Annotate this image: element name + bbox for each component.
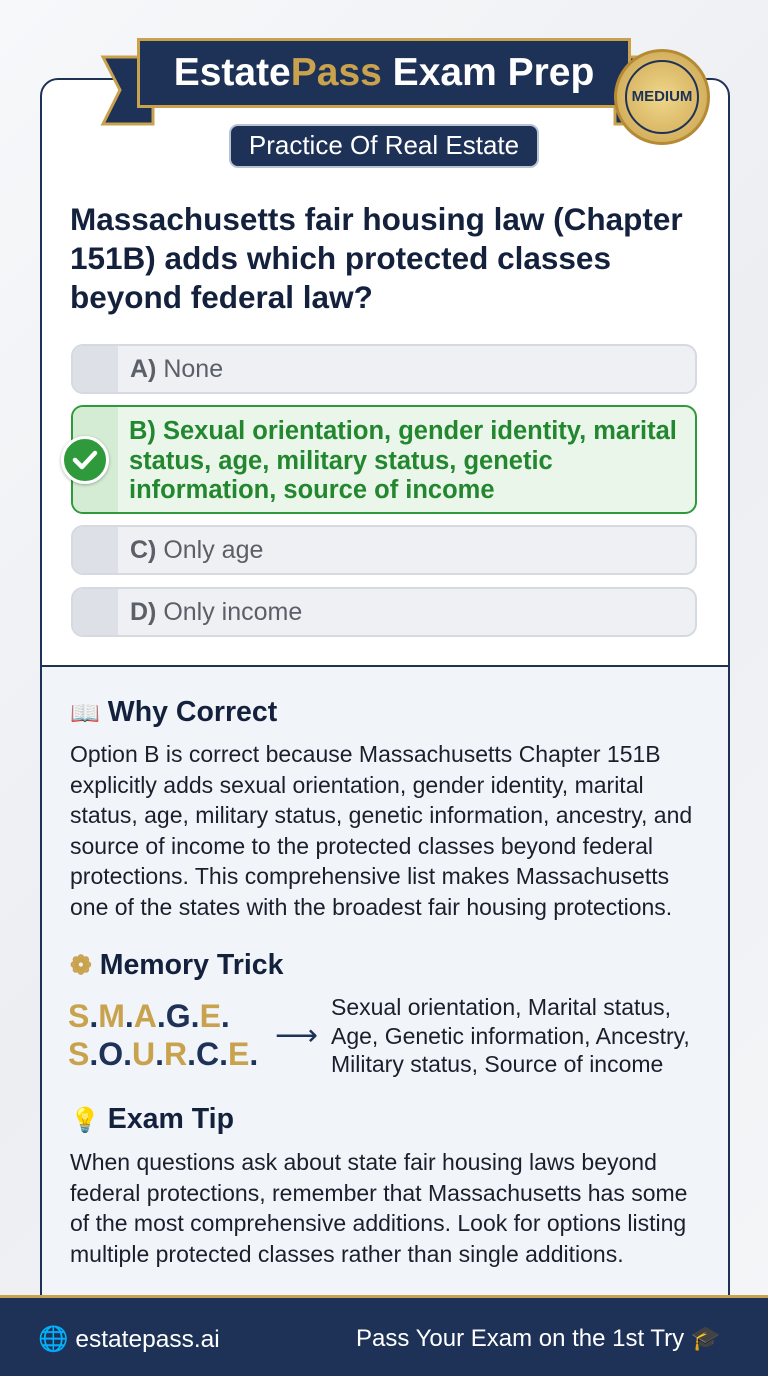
option A	[71, 344, 697, 394]
medal badge	[614, 49, 710, 145]
subtitle pill	[229, 124, 539, 168]
subtitle pill: Practice Of Real Estate	[249, 130, 519, 160]
arrow: ⟶	[275, 1019, 318, 1052]
memory trick heading: ❁ Memory Trick	[70, 949, 283, 981]
mnemonic meaning	[331, 994, 690, 1077]
option B correct	[71, 405, 697, 514]
footer tagline: Pass Your Exam on the 1st Try 🎓	[356, 1325, 721, 1352]
option C	[71, 525, 697, 575]
ribbon tail right	[614, 56, 638, 126]
lower explanation panel	[42, 665, 728, 1365]
mnemonic meaning: Military status, Source of income	[331, 1051, 663, 1077]
option A: A) None	[130, 355, 223, 383]
title banner: EstatePass Exam Prep	[174, 51, 594, 94]
exam tip body: When questions ask about state fair housing laws beyond federal protections, remember that Massachusetts has some of the most comprehensive additions. Look for options listing multiple protected classes rather than single additions.	[70, 1149, 687, 1266]
footer website: 🌐 estatepass.ai	[38, 1326, 220, 1353]
option C: C) Only age	[130, 536, 263, 564]
mnemonic meaning: Sexual orientation, Marital status,	[331, 994, 671, 1020]
mnemonic: S.M.A.G.E.	[68, 998, 230, 1034]
mnemonic: S.O.U.R.C.E.	[68, 1036, 258, 1072]
mnemonic	[68, 998, 258, 1072]
mnemonic meaning: Age, Genetic information, Ancestry,	[331, 1022, 690, 1048]
icon: check	[61, 436, 109, 484]
ribbon tail left	[100, 56, 154, 126]
option D	[71, 587, 697, 637]
medal badge: MEDIUM	[632, 88, 692, 105]
title banner	[137, 38, 631, 108]
why correct heading: 📖 Why Correct	[70, 696, 277, 728]
footer	[0, 1295, 768, 1376]
option D: D) Only income	[130, 598, 302, 626]
why correct body: Option B is correct because Massachusetts Chapter 151B explicitly adds sexual orientation, gender identity, marital status, age, military status, genetic information, ancestry, and source of income to the protected classes beyond federal protections. This comprehensive list makes Massachusetts one of the states with the broadest fair housing protections.	[70, 741, 692, 920]
exam tip heading: 💡 Exam Tip	[70, 1103, 234, 1135]
option B correct: B) Sexual orientation, gender identity, marital status, age, military status, genetic information, source of income	[129, 417, 677, 504]
question: Massachusetts fair housing law (Chapter 151B) adds which protected classes beyond federal law?	[70, 201, 683, 315]
